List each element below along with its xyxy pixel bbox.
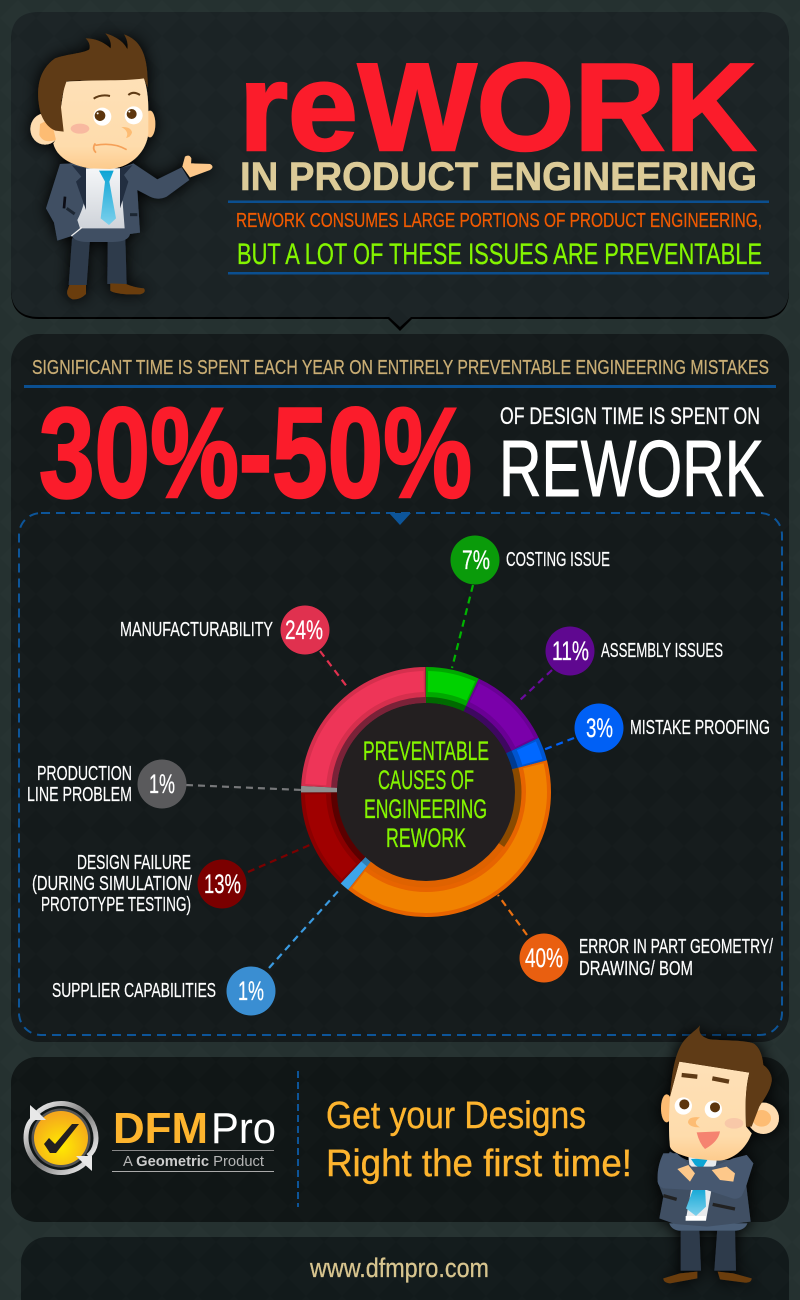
slogan: Get your Designs xyxy=(326,1095,586,1137)
panel: rework statistic and chart xyxy=(11,334,789,1042)
segment: supplier capabilities 1% xyxy=(319,685,533,899)
mouth xyxy=(697,1131,720,1149)
mouth xyxy=(94,143,127,153)
callout: supplier capabilities 1%: SUPPLIER CAPABILITIES xyxy=(52,980,216,1002)
left ear xyxy=(30,113,60,145)
right ear xyxy=(748,1103,779,1134)
hands xyxy=(677,1165,735,1182)
nose xyxy=(688,1117,700,1127)
shirt and tie xyxy=(77,168,125,228)
right eye xyxy=(705,1101,722,1118)
eyebrows xyxy=(682,1075,729,1082)
subtitle: IN PRODUCT ENGINEERING xyxy=(240,155,757,199)
illustration: worried businessman xyxy=(30,33,212,299)
callout: manufacturability 24%: 24% xyxy=(285,615,323,645)
callout: costing issue 7%: 7% xyxy=(462,545,490,575)
chart frame xyxy=(19,513,782,1035)
donut centre text: ENGINEERING xyxy=(364,794,487,824)
right ear xyxy=(145,111,155,137)
callout: design failure 13%: PROTOTYPE TESTING) xyxy=(41,894,191,916)
callout: design failure 13%: (DURING SIMULATION/ xyxy=(32,873,192,895)
callout: error in part geometry 40%: 40% xyxy=(525,943,563,973)
segment: design failure 13% xyxy=(316,682,536,902)
nose xyxy=(121,127,132,138)
hair xyxy=(670,1025,772,1127)
callout: assembly issues 11%: 11% xyxy=(552,636,589,666)
donut centre text xyxy=(363,736,489,853)
crossed arms xyxy=(658,1153,753,1199)
jacket xyxy=(658,1152,753,1227)
left eye xyxy=(675,1097,692,1115)
callout: mistake proofing 3%: 3% xyxy=(586,713,613,743)
callout: production line problem 1%: 1% xyxy=(149,769,175,799)
callout: manufacturability 24%: MANUFACTURABILITY xyxy=(120,619,273,641)
segment: mistake proofing 3% xyxy=(316,682,536,902)
logo icon xyxy=(26,1103,96,1173)
callout: assembly issues 11%: ASSEMBLY ISSUES xyxy=(601,640,723,662)
trousers xyxy=(69,238,127,285)
donut centre text: CAUSES OF xyxy=(378,765,474,795)
callout: manufacturability 24% xyxy=(120,606,348,688)
callout: design failure 13%: 13% xyxy=(204,869,241,899)
callout: costing issue 7% xyxy=(450,536,610,668)
panel: website xyxy=(21,1237,789,1300)
illustration: happy businessman xyxy=(658,1025,779,1283)
callout: production line problem 1% xyxy=(27,760,302,808)
callout: mistake proofing 3% xyxy=(543,704,770,752)
hand xyxy=(182,156,212,177)
lapels xyxy=(72,165,133,210)
segment: assembly issues 11% xyxy=(316,682,536,902)
jacket xyxy=(46,163,189,242)
jacket hem xyxy=(669,1223,747,1231)
callout: production line problem 1%: PRODUCTION xyxy=(37,763,132,785)
panel: header xyxy=(11,12,789,331)
slogan: Right the first time! xyxy=(326,1143,632,1185)
logo tagline: A Geometric Product xyxy=(123,1154,264,1170)
right eye xyxy=(125,106,143,124)
logo: DFMPro xyxy=(26,1103,276,1173)
donut centre text: REWORK xyxy=(386,823,466,853)
donut chart: preventable causes xyxy=(316,682,536,902)
hair xyxy=(38,33,148,132)
shoes xyxy=(67,283,145,299)
pockets xyxy=(663,1196,735,1209)
donut centre xyxy=(337,703,515,881)
donut centre text: PREVENTABLE xyxy=(363,736,489,766)
pockets xyxy=(64,197,137,236)
face xyxy=(53,78,148,169)
callout: error in part geometry 40%: DRAWING/ BOM xyxy=(579,958,693,980)
callout: design failure 13% xyxy=(32,844,312,916)
blush xyxy=(725,1118,743,1129)
title: reWORK xyxy=(239,39,756,177)
callout: supplier capabilities 1%: 1% xyxy=(238,976,264,1006)
segment: production line problem 1% xyxy=(319,685,533,899)
eyebrows xyxy=(94,93,140,99)
callout: production line problem 1%: LINE PROBLEM xyxy=(27,784,132,806)
logo: DFMPro: Pro xyxy=(211,1104,276,1153)
logo wordmark: DFM xyxy=(113,1104,208,1153)
slogan xyxy=(326,1095,632,1185)
big statistic: 30%-50% xyxy=(39,382,472,525)
left ear xyxy=(661,1094,672,1122)
blush xyxy=(71,124,89,134)
callout: assembly issues 11% xyxy=(518,626,723,702)
callout: costing issue 7%: COSTING ISSUE xyxy=(506,549,610,571)
panel: logo and slogan xyxy=(11,1057,789,1222)
callout: supplier capabilities 1% xyxy=(52,888,341,1016)
segment: error in part geometry 40% xyxy=(316,682,536,902)
shirt and tie xyxy=(686,1155,717,1221)
callout: design failure 13%: DESIGN FAILURE xyxy=(77,852,191,874)
website: www.dfmpro.com xyxy=(309,1253,489,1283)
shoes xyxy=(663,1272,752,1283)
callout: error in part geometry 40% xyxy=(498,895,773,982)
face xyxy=(669,1062,752,1161)
segment: costing issue 7% xyxy=(316,682,536,902)
segment: manufacturability 24% xyxy=(316,682,536,902)
trousers xyxy=(681,1228,736,1271)
left eye xyxy=(93,108,111,126)
